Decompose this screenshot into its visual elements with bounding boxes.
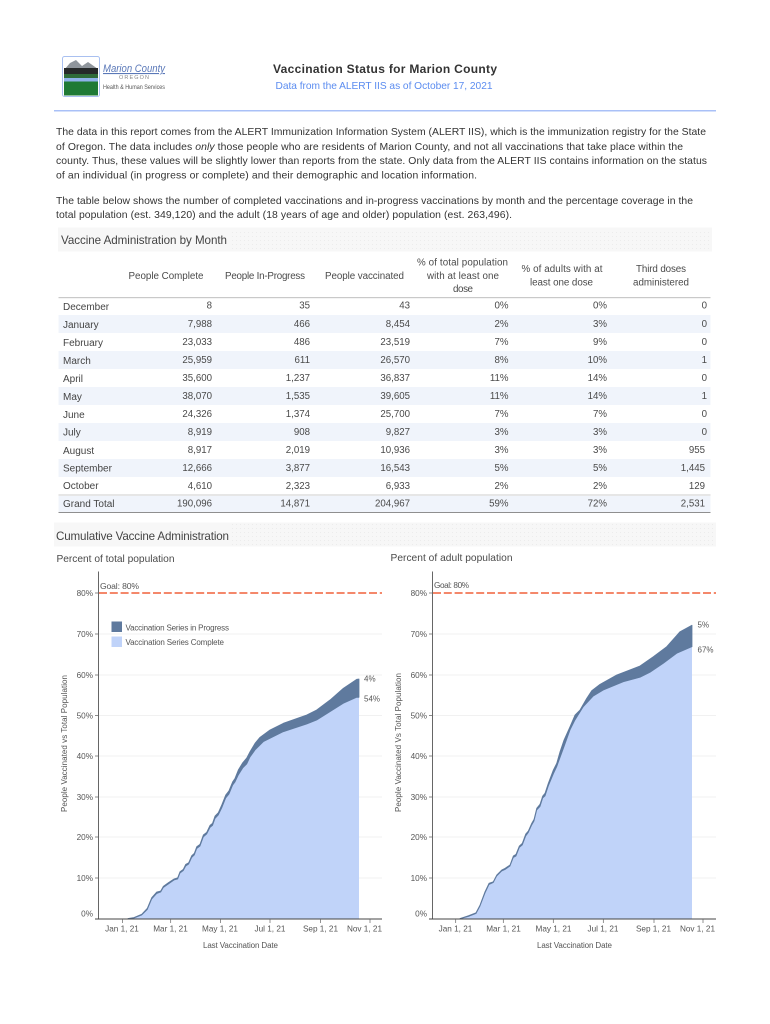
goal line bbox=[99, 592, 382, 594]
x axis labels bbox=[105, 924, 382, 934]
area: vaccination series in progress bbox=[128, 679, 359, 919]
row: October bbox=[63, 481, 705, 492]
text block: introduction: of Oregon. The data includes only those people who are residents of Marion County, and not all vaccinations that take place within the bbox=[56, 142, 683, 153]
row: April: 35,600 bbox=[182, 373, 213, 384]
row: May: 38,070 bbox=[182, 391, 213, 402]
row: August: 2,019 bbox=[286, 445, 310, 456]
row: May: 1 bbox=[702, 391, 707, 402]
y axis labels: 0% bbox=[415, 910, 427, 918]
row: December: 35 bbox=[299, 300, 310, 312]
logo: Marion County Health & Human Services: Health & Human Services bbox=[103, 85, 165, 91]
x axis labels: Jan 1, 21 bbox=[105, 924, 139, 934]
x axis labels: May 1, 21 bbox=[202, 924, 238, 934]
text block: introduction: total population (est. 349,120) and the adult (18 years of age and older) population (est. 263,496). bbox=[56, 210, 512, 221]
row: June: 7% bbox=[593, 409, 607, 420]
row: December: December bbox=[63, 302, 110, 313]
header rule bbox=[54, 110, 716, 112]
row: Grand Total: 204,967 bbox=[375, 498, 410, 510]
row: September: 12,666 bbox=[182, 463, 212, 474]
end labels: 5% bbox=[698, 620, 709, 630]
row: June: 0 bbox=[702, 409, 708, 420]
row: October: 2% bbox=[593, 481, 607, 492]
y axis labels: 10% bbox=[411, 874, 427, 883]
x axis labels: Mar 1, 21 bbox=[486, 924, 521, 934]
row: August: 955 bbox=[689, 445, 705, 456]
row: February: 23,033 bbox=[182, 337, 212, 348]
row: March: 10% bbox=[588, 355, 607, 366]
row: May: 11% bbox=[490, 391, 509, 402]
x axis labels: Sep 1, 21 bbox=[636, 924, 671, 934]
x axis labels: Jul 1, 21 bbox=[588, 924, 619, 934]
row: September: 3,877 bbox=[286, 463, 310, 474]
section heading: Vaccine Administration by Month bbox=[58, 228, 712, 252]
row: December: 0 bbox=[702, 300, 708, 312]
row: May: May bbox=[63, 392, 82, 403]
y axis labels bbox=[411, 589, 427, 918]
row: June: 25,700 bbox=[380, 409, 411, 420]
y axis labels: 10% bbox=[77, 874, 93, 883]
row: September: September bbox=[63, 464, 113, 474]
legend: Vaccination Series Complete bbox=[126, 638, 225, 647]
area: vaccination series in progress bbox=[460, 625, 692, 919]
table header row: with at least one bbox=[426, 271, 500, 282]
row: March: 611 bbox=[295, 355, 310, 366]
end labels: 67% bbox=[698, 646, 714, 654]
y axis labels: 80% bbox=[411, 589, 427, 598]
row: April: April bbox=[63, 374, 83, 385]
row: December: 43 bbox=[399, 300, 410, 312]
end labels bbox=[698, 620, 714, 654]
table header row: People Complete bbox=[128, 271, 204, 282]
row: Grand Total: 72% bbox=[588, 498, 607, 510]
row: February: 23,519 bbox=[380, 337, 410, 348]
logo: Marion County Health & Human Services: OREGON bbox=[119, 75, 149, 81]
x axis labels: Sep 1, 21 bbox=[303, 924, 338, 934]
row: July: 8,919 bbox=[188, 427, 212, 438]
section heading: Cumulative Vaccine Administration bbox=[54, 522, 716, 546]
row: August: August bbox=[63, 446, 94, 457]
axes bbox=[95, 572, 382, 923]
row: September: 5% bbox=[494, 463, 509, 474]
legend bbox=[112, 622, 229, 647]
table header row: People In-Progress bbox=[225, 271, 305, 282]
row: May: 39,605 bbox=[380, 391, 410, 402]
chart heading: percent of adult population: Percent of adult population bbox=[390, 553, 512, 564]
y axis labels: 80% bbox=[77, 589, 93, 598]
row: Grand Total: 14,871 bbox=[280, 498, 310, 510]
goal line bbox=[433, 592, 716, 594]
x axis labels: Jan 1, 21 bbox=[439, 924, 473, 934]
table header row: % of total population bbox=[417, 258, 508, 268]
row: June bbox=[63, 409, 708, 421]
end labels bbox=[364, 674, 380, 704]
y axis labels: 0% bbox=[81, 910, 93, 918]
row: February: 9% bbox=[593, 337, 607, 348]
logo: Marion County Health & Human Services bbox=[62, 56, 166, 96]
row: April bbox=[63, 373, 708, 385]
text block: introduction: The table below shows the number of completed vaccinations and in-progress vaccinations by month and the percentage coverage in the bbox=[56, 196, 693, 207]
row: March: March bbox=[63, 356, 91, 367]
row: June: 1,374 bbox=[286, 409, 311, 420]
y axis labels: 70% bbox=[77, 630, 93, 639]
subtitle: Data from the ALERT IIS as of October 17, 2021 bbox=[276, 81, 493, 92]
row: July: 3% bbox=[494, 427, 509, 438]
table header row: % of adults with at bbox=[522, 264, 603, 275]
row: February: 486 bbox=[294, 337, 310, 348]
row: March: 1 bbox=[702, 355, 707, 366]
row: October: 2,323 bbox=[286, 481, 310, 492]
y axis labels: 50% bbox=[77, 712, 93, 720]
y axis title: People Vaccinated Vs Total Population bbox=[394, 673, 403, 812]
row: July: 3% bbox=[593, 427, 607, 438]
row: July: 908 bbox=[294, 427, 310, 438]
y axis labels: 70% bbox=[411, 630, 427, 639]
row: February bbox=[63, 337, 708, 349]
y axis labels: 30% bbox=[411, 793, 427, 802]
end labels: 54% bbox=[364, 694, 380, 704]
row: Grand Total bbox=[63, 498, 705, 510]
row: January: 2% bbox=[494, 319, 509, 330]
table header row: People vaccinated bbox=[325, 271, 404, 282]
row: Grand Total: 2,531 bbox=[681, 498, 705, 510]
goal label: Goal: 80% bbox=[100, 581, 139, 591]
row: August: 3% bbox=[593, 445, 607, 456]
row: December: 8 bbox=[207, 300, 212, 312]
table header row: dose bbox=[453, 284, 474, 295]
row: October: 4,610 bbox=[188, 481, 213, 492]
row: March bbox=[63, 355, 707, 367]
row: June: June bbox=[63, 410, 85, 421]
row: Grand Total: Grand Total bbox=[63, 499, 115, 510]
text block: introduction bbox=[56, 127, 707, 221]
y axis labels: 30% bbox=[77, 793, 93, 802]
y axis labels: 50% bbox=[411, 712, 427, 720]
row: January: 466 bbox=[294, 319, 310, 330]
row: February: February bbox=[63, 338, 103, 349]
row: October: 129 bbox=[689, 481, 705, 492]
x axis labels bbox=[439, 924, 715, 934]
table header row: Third doses bbox=[636, 264, 686, 275]
x axis labels: Nov 1, 21 bbox=[680, 924, 715, 934]
row: July: 0 bbox=[702, 427, 708, 438]
row: January: 8,454 bbox=[386, 319, 411, 330]
row: Grand Total: 59% bbox=[489, 498, 509, 510]
row: April: 14% bbox=[588, 373, 607, 384]
row: July: July bbox=[63, 428, 81, 438]
row: September: 5% bbox=[593, 463, 607, 474]
row: March: 8% bbox=[494, 355, 509, 366]
logo: Marion County Health & Human Services: Marion County bbox=[103, 63, 166, 75]
row: May bbox=[63, 391, 707, 403]
row: February: 7% bbox=[494, 337, 509, 348]
table header row: least one dose bbox=[530, 278, 594, 288]
y axis labels: 40% bbox=[77, 752, 93, 761]
x axis labels: Jul 1, 21 bbox=[255, 924, 286, 934]
x axis labels: May 1, 21 bbox=[536, 924, 572, 934]
row: January: 0 bbox=[702, 319, 708, 330]
y axis labels: 40% bbox=[411, 752, 427, 761]
row: June: 7% bbox=[494, 409, 509, 420]
y axis labels: 20% bbox=[411, 833, 427, 842]
row: September: 16,543 bbox=[380, 463, 410, 474]
row: December: 0% bbox=[593, 300, 607, 312]
row: August: 8,917 bbox=[188, 445, 212, 456]
area: vaccination series complete bbox=[460, 647, 692, 919]
y axis labels: 60% bbox=[77, 671, 93, 680]
text block: introduction: of an individual (in progress or complete) and their demographic and location information. bbox=[56, 170, 477, 182]
section heading: Vaccine Administration by Month: Vaccine Administration by Month bbox=[61, 234, 227, 247]
row: December: 0% bbox=[494, 300, 509, 312]
axes bbox=[429, 572, 716, 923]
text block: introduction: The data in this report comes from the ALERT Immunization Information System (ALERT IIS), which is the immunization registry for the State bbox=[56, 127, 706, 138]
row: March: 25,959 bbox=[182, 355, 212, 366]
row: August: 3% bbox=[494, 445, 509, 456]
row: December bbox=[63, 300, 708, 313]
row: May: 1,535 bbox=[286, 391, 310, 402]
y axis labels bbox=[77, 589, 93, 918]
end labels: 4% bbox=[364, 674, 376, 684]
row: May: 14% bbox=[588, 391, 607, 402]
row: April: 36,837 bbox=[380, 373, 410, 384]
area: vaccination series complete bbox=[128, 697, 359, 919]
row: April: 1,237 bbox=[286, 373, 310, 384]
y axis title: People Vaccinated vs Total Population bbox=[60, 675, 69, 812]
row: April: 11% bbox=[490, 373, 509, 384]
title: Vaccination Status for Marion County bbox=[273, 62, 497, 76]
table: vaccine administration by month bbox=[58, 258, 710, 513]
row: September: 1,445 bbox=[681, 463, 705, 474]
row: January: January bbox=[63, 320, 99, 331]
row: January: 3% bbox=[593, 319, 607, 330]
row: March: 26,570 bbox=[380, 355, 411, 366]
row: June: 24,326 bbox=[182, 409, 212, 420]
row: July bbox=[63, 427, 708, 438]
text block: introduction: county. Thus, these values will be slightly lower than reports from the state. Only data from the ALERT IIS contains information on the status bbox=[56, 156, 707, 167]
row: Grand Total: 190,096 bbox=[177, 498, 212, 510]
table header row: administered bbox=[633, 278, 689, 288]
row: October: 2% bbox=[494, 481, 509, 492]
row: January bbox=[63, 319, 708, 331]
chart: percent of adult population bbox=[394, 572, 716, 950]
goal label: Goal: 80% bbox=[434, 581, 469, 590]
x axis labels: Nov 1, 21 bbox=[347, 924, 382, 934]
legend: Vaccination Series in Progress bbox=[126, 624, 229, 632]
row: August: 10,936 bbox=[380, 445, 410, 456]
row: September bbox=[63, 463, 705, 474]
chart heading: percent of total population: Percent of total population bbox=[56, 554, 174, 565]
row: October: October bbox=[63, 481, 99, 492]
x axis title: Last Vaccination Date bbox=[537, 941, 613, 950]
row: February: 0 bbox=[702, 337, 708, 348]
x axis title: Last Vaccination Date bbox=[203, 941, 279, 950]
row: April: 0 bbox=[702, 373, 708, 384]
chart: percent of total population bbox=[60, 572, 382, 950]
y axis labels: 20% bbox=[77, 833, 93, 842]
section heading: Cumulative Vaccine Administration: Cumulative Vaccine Administration bbox=[56, 530, 229, 543]
row: October: 6,933 bbox=[386, 481, 410, 492]
y axis labels: 60% bbox=[411, 671, 427, 680]
row: January: 7,988 bbox=[188, 319, 212, 330]
table header row bbox=[128, 258, 689, 295]
row: August bbox=[63, 445, 705, 457]
row: July: 9,827 bbox=[386, 427, 410, 438]
x axis labels: Mar 1, 21 bbox=[153, 924, 188, 934]
